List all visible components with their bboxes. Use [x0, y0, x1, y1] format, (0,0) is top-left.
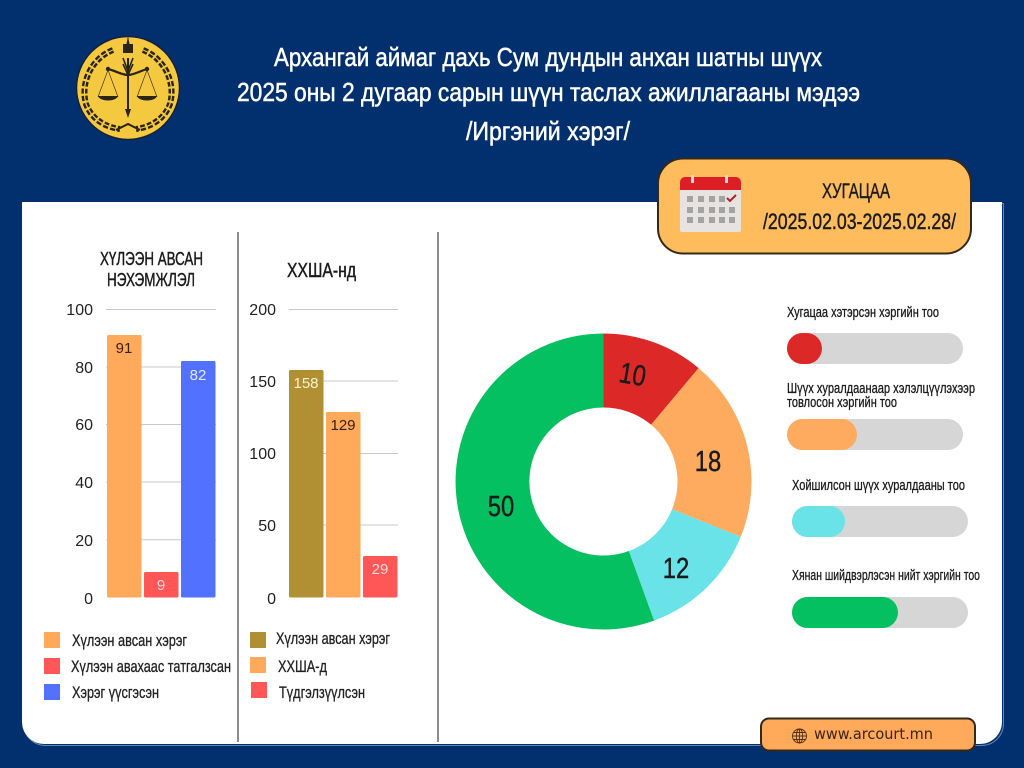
bar chart: XXSHA: 200 [249, 302, 276, 319]
website badge [761, 718, 975, 750]
bar chart: XXSHA: 150 [249, 374, 276, 391]
icon: court emblem [76, 36, 180, 140]
title: Архангай аймаг дахь Сум дундын анхан шатны шүүх [274, 42, 822, 72]
bar chart: received filings: 20 [75, 533, 93, 550]
donut chart: 12 [663, 552, 689, 585]
heading: received filings: ХҮЛЭЭН АВСАН [100, 249, 203, 269]
bar chart: XXSHA: 29 [372, 561, 388, 578]
text: period dates: /2025.02.03-2025.02.28/ [763, 209, 957, 234]
bar chart: received filings: 0 [84, 591, 93, 608]
bar chart: XXSHA: 0 [267, 591, 276, 608]
bar chart: received filings: 100 [66, 302, 93, 319]
icon: globe [792, 729, 806, 743]
progress: overdue cases: Хугацаа хэтэрсэн хэргийн тоо [787, 305, 939, 321]
legend: received filings: Хүлээн авахаас татгалзсан [71, 657, 231, 676]
bar chart: received filings: 91 [116, 340, 132, 357]
website badge: www.arcourt.mn [814, 725, 933, 743]
title: /Иргэний хэрэг/ [466, 116, 631, 146]
progress: overdue cases [787, 305, 963, 364]
bar chart: received filings: 60 [75, 417, 93, 434]
donut chart [456, 334, 751, 629]
title [237, 42, 860, 146]
legend: received filings [44, 631, 231, 702]
bar chart: received filings [66, 302, 216, 608]
donut chart: 50 [488, 490, 514, 523]
bar chart: XXSHA: 129 [330, 417, 356, 434]
progress: postponed hearings: Хойшилсон шүүх хуралдааны тоо [792, 478, 965, 494]
progress: scheduled cases [787, 381, 975, 450]
bar chart: received filings: 40 [75, 475, 93, 492]
panel: XXSHA chart [249, 260, 398, 702]
bar chart: XXSHA: 158 [293, 375, 319, 392]
text: period heading: ХУГАЦАА [822, 180, 890, 203]
bar chart: XXSHA [249, 302, 398, 608]
legend: XXSHA: ХХША-д [278, 657, 327, 676]
bar chart: received filings: 80 [75, 360, 93, 377]
panel: period box [658, 158, 971, 254]
legend: XXSHA [250, 629, 390, 702]
heading: received filings [100, 249, 203, 290]
bar chart: received filings: 82 [190, 367, 206, 384]
bar chart: XXSHA: 100 [249, 446, 276, 463]
panel: received filings chart [44, 249, 231, 702]
bar chart: received filings: 9 [157, 577, 165, 594]
progress: resolved cases [792, 568, 980, 628]
heading: received filings: НЭХЭМЖЛЭЛ [107, 270, 195, 290]
legend: XXSHA: Түдгэлзүүлсэн [279, 683, 365, 702]
title: 2025 оны 2 дугаар сарын шүүн таслах ажиллагааны мэдээ [237, 77, 860, 107]
donut chart: 10 [617, 356, 649, 393]
bar chart: XXSHA: 50 [258, 518, 276, 535]
donut chart: 18 [695, 445, 721, 478]
progress: scheduled cases: товлосон хэргийн тоо [787, 395, 897, 411]
progress: postponed hearings [792, 478, 968, 537]
panel: white content panel [22, 202, 1002, 744]
legend: received filings: Хүлээн авсан хэрэг [72, 631, 187, 650]
legend: XXSHA: Хүлээн авсан хэрэг [276, 629, 390, 648]
icon: calendar [680, 175, 741, 232]
heading: XXSHA: ХХША-нд [287, 260, 356, 282]
legend: received filings: Хэрэг үүсгэсэн [72, 683, 159, 702]
